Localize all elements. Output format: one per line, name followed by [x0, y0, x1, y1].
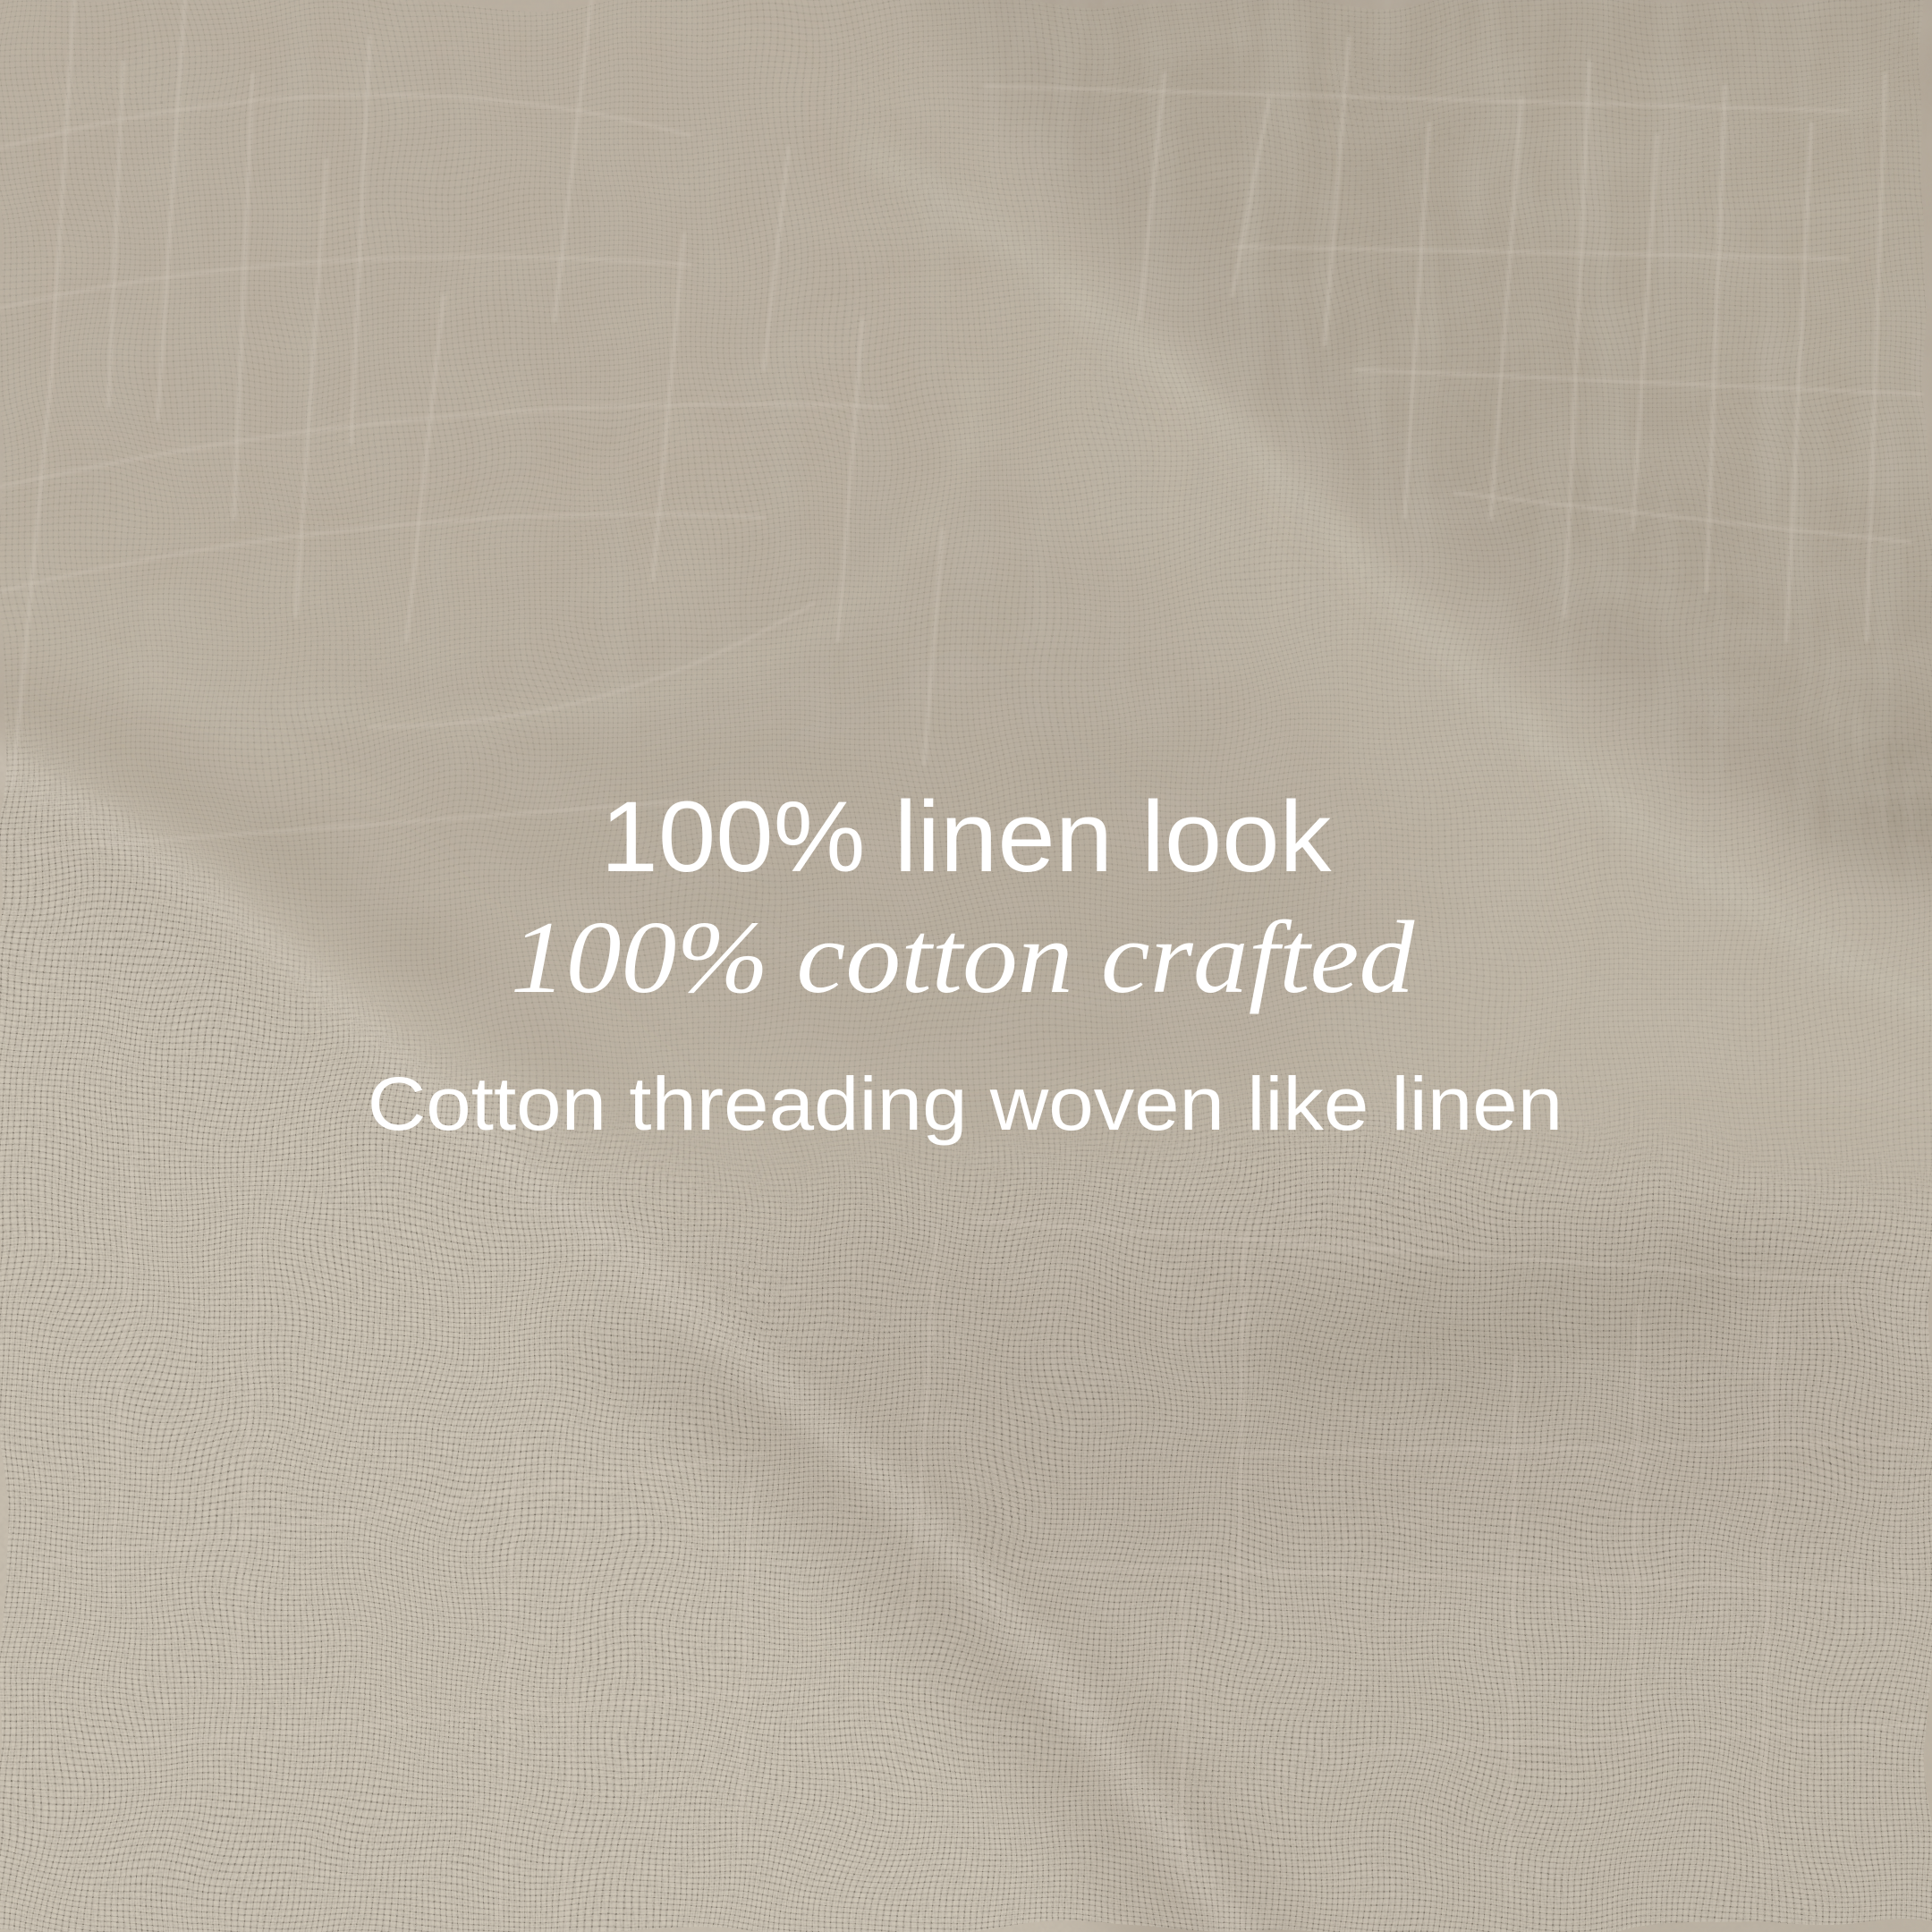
subheading: cotton threading: Cotton threading woven like linen	[368, 1062, 1563, 1146]
vertical streaks in upper cloth	[1245, 206, 1862, 771]
heading: 100% cotton crafted: 100% cotton crafted	[511, 901, 1414, 1015]
bottom right cloth	[1158, 1577, 1932, 1932]
lower valley	[690, 1209, 1932, 1602]
right dark patch	[1811, 721, 1932, 856]
lobe rim	[296, 369, 975, 722]
diagonal shadow under central lobe	[0, 653, 764, 1182]
heading: 100% linen look: 100% linen look	[601, 781, 1331, 893]
top-left cloth	[0, 0, 1060, 665]
top-right shadowed cloth	[887, 0, 1932, 936]
bright ridge: lower-left fold	[0, 751, 1257, 1932]
dark crease right	[1244, 1241, 1848, 1397]
bright ridge: upper fold	[862, 148, 1932, 1022]
central lobe	[247, 407, 1454, 1136]
bottom diagonal shadow	[542, 1331, 1355, 1932]
lower-left bright cloth	[0, 789, 1208, 1932]
